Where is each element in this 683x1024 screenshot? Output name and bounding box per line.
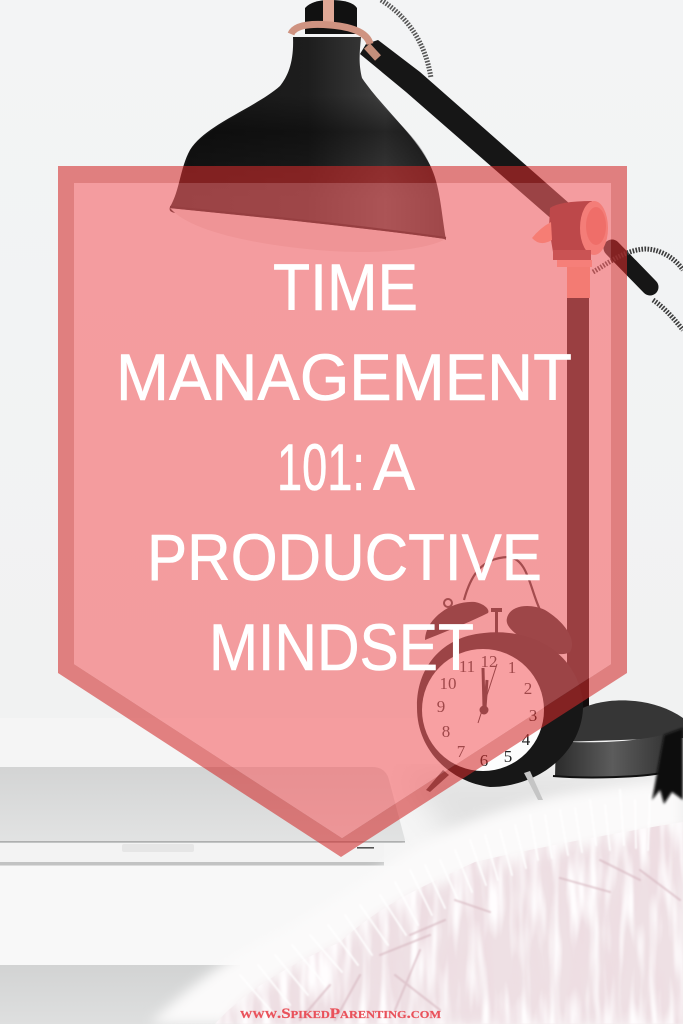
clock numerals: 1 xyxy=(508,658,516,677)
shade xyxy=(170,37,446,240)
title: TIME xyxy=(273,250,418,324)
clock numerals: 4 xyxy=(522,730,531,749)
clock numerals: 5 xyxy=(504,747,512,766)
clock bells xyxy=(425,599,572,654)
desk lamp xyxy=(170,0,683,777)
pentagon banner xyxy=(58,166,627,857)
clock numerals: 7 xyxy=(457,742,466,761)
clock face xyxy=(422,649,544,771)
website footer: www.SpikedParenting.com xyxy=(240,1006,442,1022)
clock numerals: 6 xyxy=(480,751,488,770)
lamp pole xyxy=(567,290,589,710)
clock handle xyxy=(464,557,541,612)
alarm clock xyxy=(417,557,583,800)
clock numerals: 10 xyxy=(440,674,456,693)
desk shelf and lower surface xyxy=(0,866,683,1024)
black fur tuft xyxy=(652,728,683,804)
clock body xyxy=(417,632,583,787)
pink fur rug xyxy=(150,778,683,1024)
title: A xyxy=(373,430,415,504)
braided cord lower xyxy=(593,249,683,330)
laptop xyxy=(0,767,405,866)
clock numerals: 3 xyxy=(529,706,537,725)
title: PRODUCTIVE xyxy=(147,520,542,594)
lamp base xyxy=(553,700,683,777)
upper arm xyxy=(360,40,570,222)
arm joint xyxy=(532,201,608,267)
lower arm xyxy=(612,248,650,287)
clock numerals xyxy=(437,652,537,770)
shade rim xyxy=(170,207,446,238)
banner inner panel xyxy=(74,183,611,838)
shade underside xyxy=(170,208,446,252)
clock numerals: 8 xyxy=(442,722,450,741)
clock numerals: 2 xyxy=(524,679,532,698)
clock numerals: 12 xyxy=(480,652,498,671)
clock numerals: 9 xyxy=(437,697,445,716)
shade neck xyxy=(305,0,357,34)
clock numerals: 11 xyxy=(459,657,475,676)
copper ring xyxy=(291,24,378,58)
clock feet xyxy=(426,770,543,800)
title xyxy=(116,250,572,684)
title: MANAGEMENT xyxy=(116,340,572,414)
clock hands xyxy=(478,664,497,723)
title: MINDSET xyxy=(209,610,474,684)
banner border band xyxy=(58,166,627,857)
braided cord upper xyxy=(381,0,431,78)
title: 101: xyxy=(277,430,365,504)
copper pole collar xyxy=(567,266,590,298)
